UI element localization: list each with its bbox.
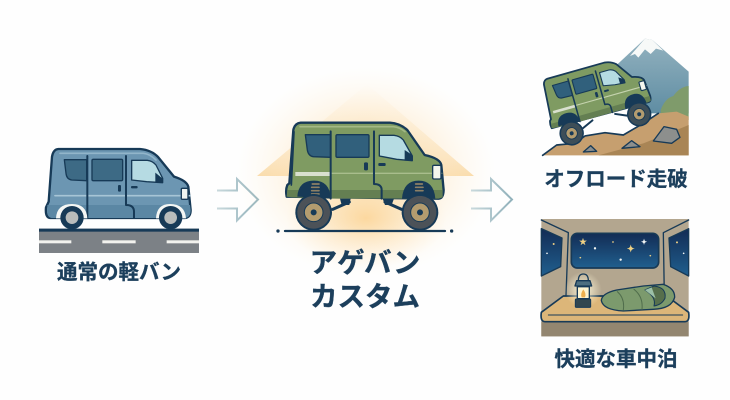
arrow: left to centre xyxy=(217,179,258,220)
ground line xyxy=(276,229,453,233)
van body xyxy=(46,149,191,218)
panel: off-road illustration xyxy=(538,39,689,155)
windows with night sky: ✦ xyxy=(627,244,635,254)
road xyxy=(39,229,199,253)
label: comfortable car camping: 快適な車中泊 xyxy=(554,348,678,371)
heading: central label: カスタム xyxy=(310,281,420,312)
label: off-road driving: オフロード走破 xyxy=(544,168,688,191)
arrow: centre to right xyxy=(471,179,512,220)
wheels xyxy=(296,195,437,230)
bed platform xyxy=(541,296,689,322)
rocky slope xyxy=(543,112,689,155)
label: regular kei van: 通常の軽バン xyxy=(57,261,181,284)
panel: central glow and triangle xyxy=(236,67,496,277)
panel: car camping illustration xyxy=(541,219,689,336)
heading: central label xyxy=(310,247,420,312)
heading: central label: アゲバン xyxy=(310,247,420,278)
windows with night sky: ✦ xyxy=(641,237,647,246)
lantern xyxy=(565,272,602,308)
central illustration: lifted green van xyxy=(276,123,453,233)
van windows xyxy=(64,159,163,183)
windows with night sky xyxy=(541,229,689,276)
van windows xyxy=(305,135,412,161)
windows with night sky: ★ xyxy=(579,238,587,247)
wheels xyxy=(60,206,182,229)
mountain xyxy=(617,39,689,113)
interior wall xyxy=(541,219,689,336)
wheel arches xyxy=(297,181,435,199)
hill bush xyxy=(661,86,689,120)
van body xyxy=(286,123,444,205)
suspension arms xyxy=(333,202,402,209)
tilted van xyxy=(538,53,657,149)
sleeping bag xyxy=(601,284,675,311)
left-hand illustration: regular kei van on road xyxy=(39,149,199,253)
